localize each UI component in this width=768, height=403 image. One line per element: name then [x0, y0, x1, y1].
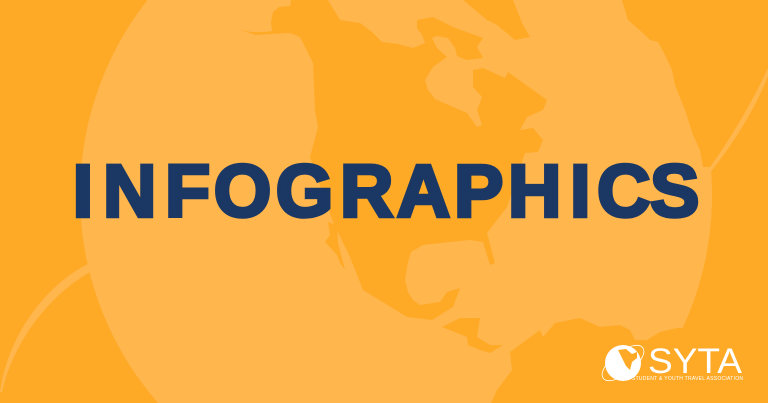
logo globe [605, 345, 641, 381]
logo wordmark: SYTA [648, 342, 743, 381]
Baja California [325, 222, 345, 270]
SYTA logo [597, 339, 743, 387]
title: INFOGRAPHICS [73, 150, 699, 232]
logo tagline: STUDENT & YOUTH TRAVEL ASSOCIATION [632, 376, 743, 382]
Greenland [463, 0, 530, 40]
North America landmass [240, 0, 547, 320]
orbit ring, right [708, 68, 768, 173]
South America [491, 318, 768, 403]
Africa and Europe edge [622, 0, 768, 167]
logo globe land [618, 349, 637, 370]
Central America [442, 318, 503, 353]
logo orbit [597, 339, 649, 387]
continents [240, 0, 768, 403]
orbit ring, left [0, 264, 90, 392]
